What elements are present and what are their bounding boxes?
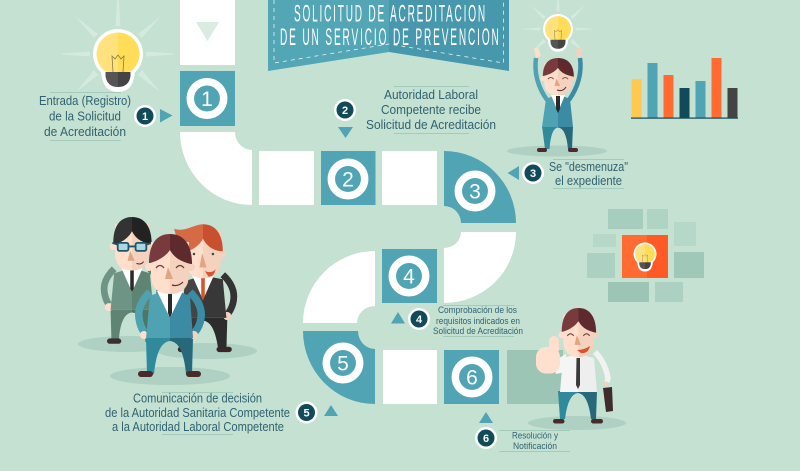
step 5 badge	[296, 402, 318, 424]
step 2 label	[366, 86, 496, 134]
legs	[146, 338, 170, 374]
start tile	[180, 0, 235, 65]
shoes	[553, 419, 564, 424]
hands	[140, 331, 148, 339]
step 2 label: Autoridad Laboral	[384, 87, 478, 102]
step 1 tile: 1	[201, 88, 213, 111]
white tile a	[259, 151, 314, 205]
step 4 arrow	[391, 312, 405, 324]
step 6 arrow	[479, 412, 493, 423]
step 4 label: requisitos indicados en	[436, 316, 520, 327]
step 5 arrow	[324, 405, 338, 416]
head	[558, 308, 598, 357]
step 5 label: de la Autoridad Sanitaria Competente	[105, 405, 290, 420]
step 4 label: Solicitud de Acreditación	[433, 326, 523, 337]
step 3 label	[549, 159, 628, 189]
step 4 label	[433, 305, 523, 337]
step 6 label: Resolución y	[512, 430, 558, 442]
briefcase	[603, 387, 613, 412]
white tile b	[382, 151, 437, 205]
head	[145, 234, 195, 294]
step 4 badge: 4	[416, 314, 423, 326]
step 4 badge	[408, 308, 430, 330]
step 5 label: a la Autoridad Laboral Competente	[112, 419, 284, 434]
step 5 tile	[303, 331, 375, 404]
step 3 badge: 3	[530, 168, 536, 180]
step 1 label: de la Solicitud	[49, 108, 121, 124]
icon: bulb	[634, 242, 656, 271]
arms raised	[535, 58, 547, 100]
step 2 badge	[334, 99, 356, 121]
step 4 tile	[382, 249, 437, 303]
bar chart	[631, 58, 738, 119]
step 5 badge: 5	[303, 408, 310, 420]
step 3 label: el expediente	[555, 173, 622, 188]
character: man thumbs up	[528, 308, 626, 430]
character: man with glasses	[78, 217, 176, 352]
step 3 label: Se "desmenuza"	[549, 159, 628, 174]
arms	[139, 292, 150, 332]
step 6 badge	[475, 427, 497, 449]
title ribbon	[268, 0, 509, 71]
step 5 label	[105, 390, 290, 435]
end tile	[507, 350, 563, 404]
step 2 tile	[321, 151, 376, 205]
step 1 badge	[134, 105, 156, 127]
step 6 label: Notificación	[513, 441, 557, 452]
shirt	[560, 354, 578, 392]
step 2 label: Solicitud de Acreditación	[366, 117, 496, 132]
jacket	[542, 94, 558, 127]
curved tile 1	[180, 132, 252, 205]
character: man celebrating	[507, 47, 607, 156]
icon: light bulb left	[62, 0, 174, 92]
step 3 tile	[444, 151, 516, 223]
arrow 3	[508, 166, 519, 180]
step 2 label: Competente recibe	[381, 102, 481, 117]
step 1 badge: 1	[142, 111, 148, 123]
step 6 label	[499, 430, 570, 452]
white tile c	[383, 350, 437, 404]
legs	[542, 126, 558, 149]
step 4 label: Comprobación de los	[438, 305, 517, 316]
step 5 label: Comunicación de decisión	[133, 390, 262, 406]
head	[540, 58, 576, 95]
orange tile	[622, 235, 647, 278]
step 3 badge	[522, 162, 544, 184]
title ribbon: DE UN SERVICIO DE PREVENCION	[280, 23, 499, 50]
character: red haired man	[157, 224, 257, 359]
step 6 badge: 6	[483, 433, 489, 445]
arm	[595, 352, 608, 382]
step 3 tile: 3	[469, 180, 481, 204]
shoes	[537, 148, 547, 152]
board path	[180, 0, 563, 404]
step 2 tile: 2	[342, 168, 354, 192]
arrow 2	[338, 127, 353, 138]
curved tile 3	[303, 251, 375, 323]
hands	[534, 47, 541, 58]
step 5 tile: 5	[337, 352, 349, 376]
arrow 1	[160, 109, 172, 122]
jacket	[146, 288, 170, 338]
step 2 badge: 2	[342, 105, 348, 117]
legs	[558, 391, 578, 419]
step 1 label: de Acreditación	[44, 124, 126, 139]
step 4 tile: 4	[403, 266, 415, 288]
thumbs up hand	[536, 336, 560, 374]
step 6 tile: 6	[466, 366, 478, 390]
character: front man	[110, 234, 230, 385]
step 1 tile	[180, 71, 235, 126]
tie	[576, 358, 580, 389]
step 1 label	[39, 92, 131, 141]
curved tile 2	[444, 232, 516, 303]
brick cluster with bulb	[587, 209, 704, 302]
step 1 label: Entrada (Registro)	[39, 93, 131, 108]
step 6 tile	[444, 350, 499, 404]
shoes	[138, 371, 153, 377]
title ribbon: SOLICITUD DE ACREDITACION	[294, 0, 485, 27]
icon: light bulb top	[523, 0, 593, 53]
